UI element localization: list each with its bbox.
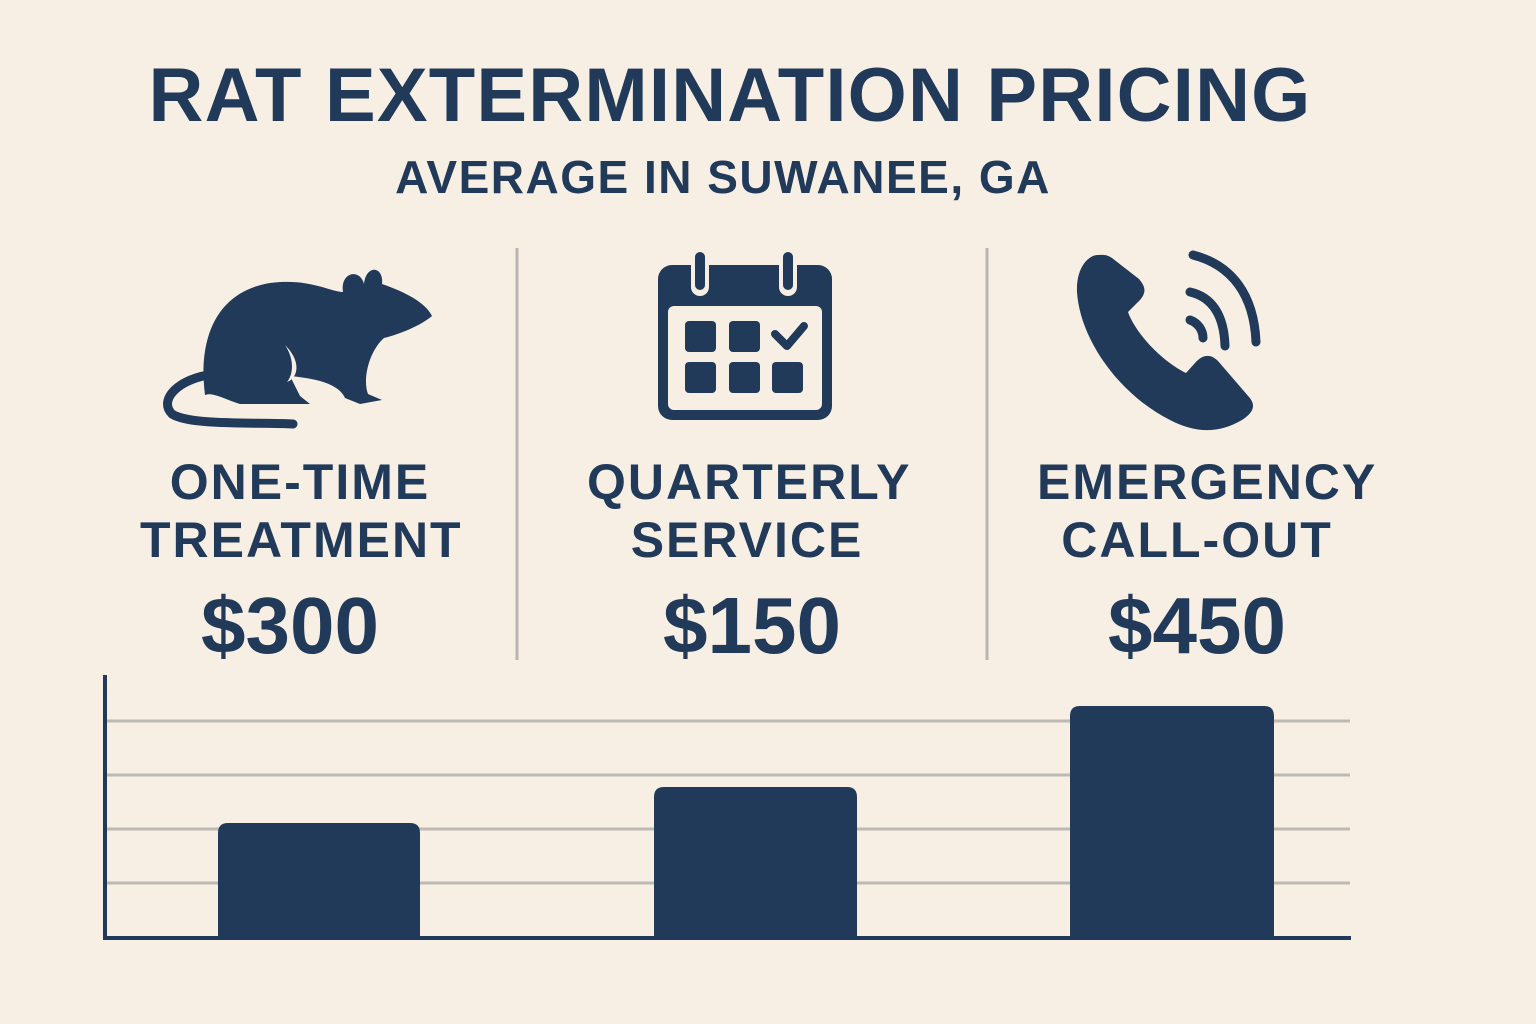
title: RAT EXTERMINATION PRICING bbox=[149, 53, 1311, 138]
label: one-time treatment bbox=[140, 454, 463, 568]
icon: phone bbox=[1077, 255, 1256, 430]
label: quarterly service bbox=[587, 454, 912, 568]
label: emergency call-out: CALL-OUT bbox=[1061, 512, 1333, 568]
label: emergency call-out bbox=[1037, 454, 1377, 568]
price: $450: $450 bbox=[1108, 581, 1286, 670]
price: $150: $150 bbox=[663, 581, 841, 670]
label: one-time treatment: TREATMENT bbox=[140, 512, 463, 568]
icon: rat bbox=[168, 270, 432, 424]
label: quarterly service: QUARTERLY bbox=[587, 454, 912, 510]
label: emergency call-out: EMERGENCY bbox=[1037, 454, 1377, 510]
label: quarterly service: SERVICE bbox=[631, 512, 863, 568]
price: $300: $300 bbox=[201, 581, 379, 670]
subtitle: AVERAGE IN SUWANEE, GA bbox=[395, 151, 1051, 203]
icon: calendar bbox=[658, 248, 832, 420]
label: one-time treatment: ONE-TIME bbox=[170, 454, 430, 510]
divider bbox=[516, 248, 518, 660]
